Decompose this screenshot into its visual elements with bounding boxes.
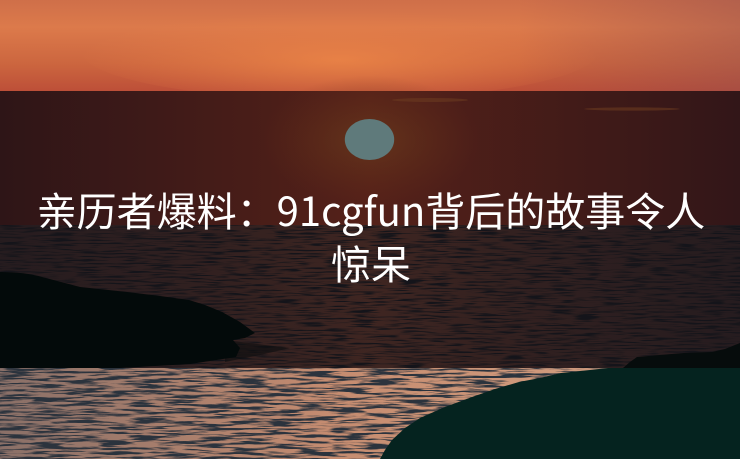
right headland dark top: [623, 343, 740, 368]
title: 亲历者爆料：91cgfun背后的故事令人: [37, 180, 705, 238]
left headland tail reflection: [225, 340, 290, 362]
sun: [345, 119, 394, 160]
sky: [0, 0, 740, 100]
left headland silhouette: [0, 272, 255, 368]
right headland teal foreground: [380, 368, 740, 459]
dark overlay band sky: [0, 75, 740, 225]
bright sea: [0, 368, 740, 459]
title: [37, 180, 705, 291]
title: 惊呆: [331, 233, 411, 291]
dark sea: [0, 225, 740, 368]
